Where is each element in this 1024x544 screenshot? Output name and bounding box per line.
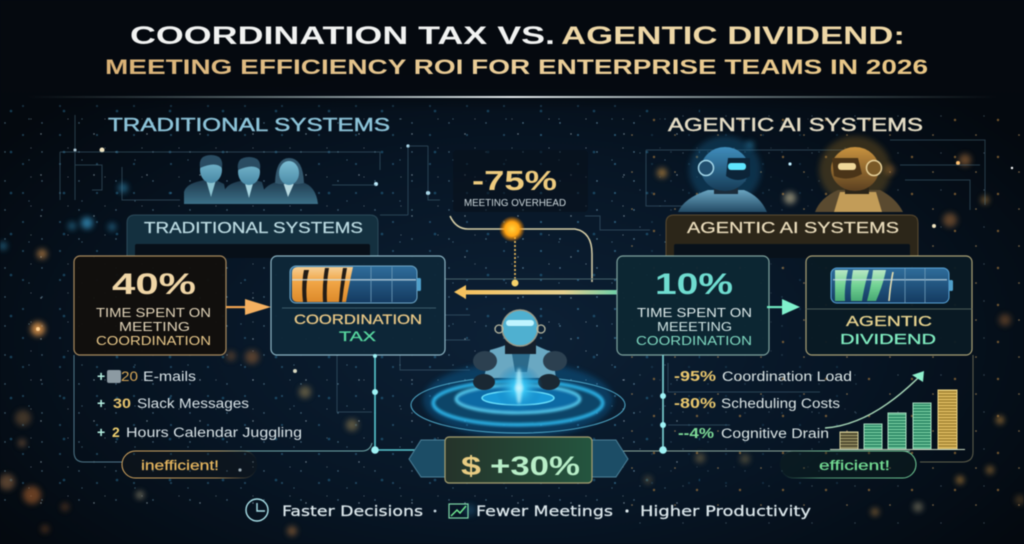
badge: plus 30 percent ROI: +30% [490,451,580,481]
panel header: agentic AI systems: AGENTIC AI SYSTEMS [687,220,899,237]
title [105,22,928,79]
heading: agentic AI systems: AGENTIC AI SYSTEMS [668,115,923,135]
icon: overhead node [499,216,525,286]
pill: inefficient [122,451,257,478]
panel header: agentic AI systems [666,215,918,258]
list: agentic savings [674,369,852,442]
connector lines from overhead node [445,216,617,283]
list item: scheduling costs [674,396,840,412]
icon: three business people [184,155,318,204]
panel: 10 percent time spent: TIME SPENT ON [637,305,752,320]
list item: e-mails: 20 [121,368,138,384]
title line one [130,22,905,50]
list: traditional costs [97,368,302,440]
list item: slack messages: Slack Messages [137,396,249,411]
list item: calendar juggling: Hours Calendar Juggling [126,425,302,440]
left ribbon [409,440,445,477]
callout: meeting overhead: -75% [472,165,557,196]
icon: gold robot [815,136,903,212]
list item: cognitive drain: --4% [678,426,714,442]
right ribbon [592,440,628,477]
panel: coordination tax: COORDINATION [294,311,422,327]
list item: slack messages [97,395,249,411]
panel: 10 percent time spent [617,256,769,355]
badge: plus 30 percent ROI: $ [461,451,481,481]
icon: clock [246,499,268,521]
list item: e-mails: + [97,368,105,384]
list item: cognitive drain [678,426,829,442]
list item: slack messages: + [97,395,105,411]
icon: orange battery [290,266,421,303]
pill: efficient [780,451,916,478]
icon: chart [449,504,468,518]
panel: 10 percent time spent: 10% [655,268,733,301]
frame: agentic list [590,355,973,462]
list item: scheduling costs: -80% [674,396,716,412]
list item: calendar juggling: 2 [112,424,120,440]
title line one: COORDINATION TAX VS. [130,22,555,50]
panel: agentic dividend: AGENTIC [846,313,932,330]
main divider rule [25,96,1000,98]
icon: green battery [831,268,953,303]
connector nodes [371,354,667,454]
list item: slack messages: 30 [113,395,131,411]
panel: 10 percent time spent: COORDINATION [636,333,752,348]
title line one: AGENTIC DIVIDEND: [561,22,905,50]
footer text: higher productivity: Higher Productivity [640,504,812,520]
arrow: 10 percent to agentic dividend [767,299,800,315]
list item: coordination load: -95% [674,369,716,385]
callout: meeting overhead [453,150,588,212]
list item: coordination load [674,369,852,385]
pill: inefficient: inefficient! [141,458,219,473]
pill: efficient: efficient! [819,458,890,473]
list item: calendar juggling [97,424,302,440]
circuit traces [60,115,985,425]
separator dot [434,510,436,512]
subtitle: MEETING EFFICIENCY ROI FOR ENTERPRISE TEAMS IN 2026 [105,56,928,79]
arrow: 40 percent to coordination tax [226,299,271,315]
list item: e-mails: E-mails [143,369,196,384]
panel: coordination tax [271,256,445,355]
footer text: fewer meetings: Fewer Meetings [476,504,613,520]
list item: coordination load: Coordination Load [722,369,852,384]
footer text: faster decisions: Faster Decisions [282,504,423,520]
arrow: agentic to traditional [454,285,617,299]
panel: agentic dividend: DIVIDEND [840,331,936,348]
separator dot [625,509,629,513]
panel: agentic dividend [806,256,972,355]
frame: traditional list [74,355,445,462]
panel header: traditional systems [127,215,378,258]
panel: 40 percent time spent: 40% [112,268,196,301]
bar chart: rising productivity [825,371,965,450]
heading: traditional systems: TRADITIONAL SYSTEMS [108,115,390,135]
panel: 40 percent time spent [74,256,226,355]
panel: 40 percent time spent: COORDINATION [96,333,211,348]
callout: meeting overhead: MEETING OVERHEAD [464,198,566,209]
list item: scheduling costs: Scheduling Costs [721,396,840,411]
badge: plus 30 percent ROI [409,437,628,483]
icon: blue robot [678,136,767,212]
list item: calendar juggling: + [97,424,105,440]
list item: e-mails [97,368,196,384]
panel: 40 percent time spent: MEETING [119,319,190,334]
robot body [473,310,567,390]
panel header: traditional systems: TRADITIONAL SYSTEMS [144,220,363,237]
panel: 40 percent time spent: TIME SPENT ON [96,305,211,320]
arrow: growth trend [825,371,924,428]
panel: coordination tax: TAX [339,328,377,344]
panel: 10 percent time spent: MEEETING [657,319,732,334]
list item: cognitive drain: Cognitive Drain [721,426,829,441]
footer benefits [246,499,812,521]
illustration: central robot on holographic platform [411,310,625,438]
